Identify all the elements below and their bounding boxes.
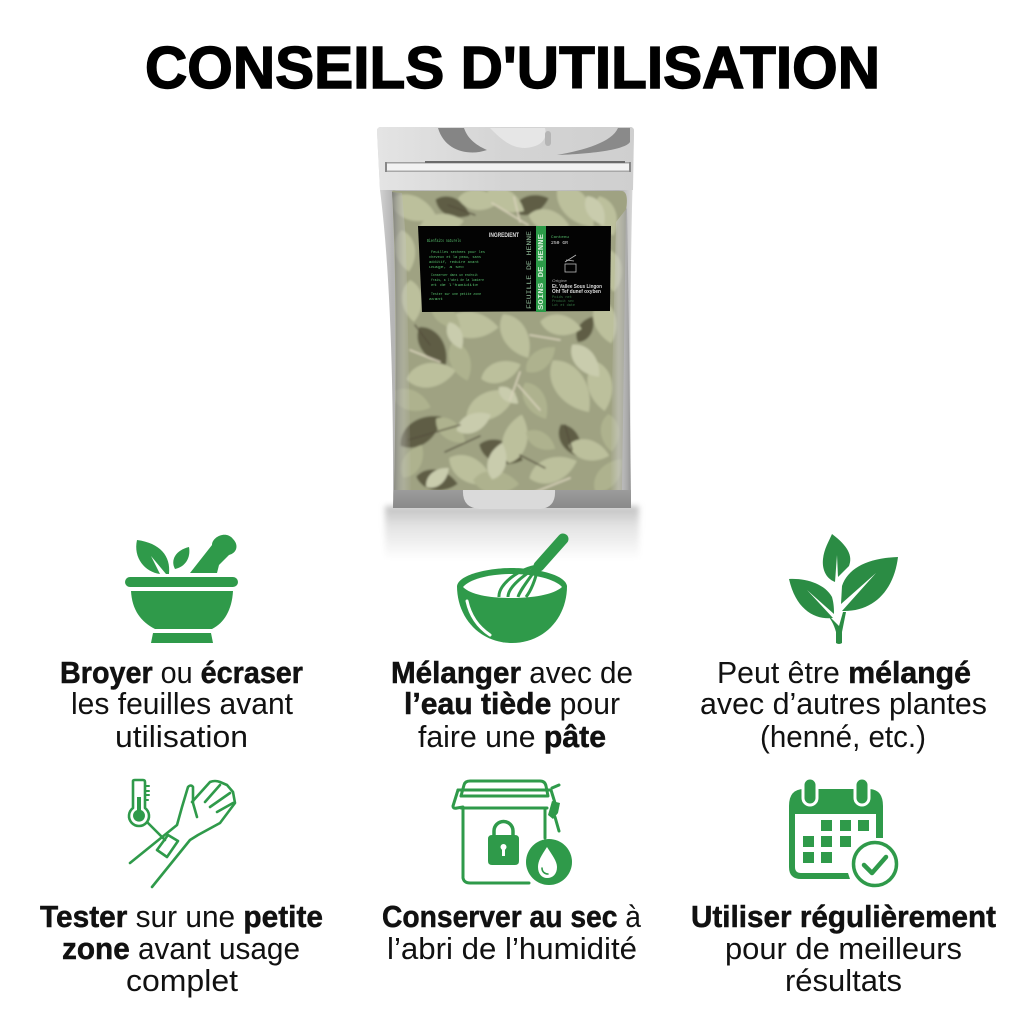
pouch top flap <box>377 127 634 190</box>
text: broyer: utilisation <box>115 719 248 754</box>
green label strip <box>536 226 546 312</box>
text: utiliser <box>691 899 996 998</box>
text: peut etre melange: avec d’autres plantes <box>700 686 987 721</box>
text: broyer <box>60 655 303 754</box>
black product label: Conserver dans un endroit <box>431 273 478 278</box>
pouch side gussets <box>392 192 631 509</box>
tip 6: use regularly <box>691 778 996 998</box>
black product label: FEUILLE DE HENNE <box>526 231 533 309</box>
black product label <box>418 226 611 312</box>
black product label: Produit sec <box>552 299 574 304</box>
black product label: 250 GR <box>551 240 568 246</box>
icon: plant sprig <box>789 534 898 644</box>
black product label: cheveux et la peau, sans <box>429 255 482 260</box>
black product label: Ohf Tef dunef oxyben <box>552 289 601 295</box>
black product label: Poids net <box>552 295 572 300</box>
tip 4: patch test <box>40 780 323 998</box>
pouch reflection <box>385 506 639 560</box>
product: pouch of dried leaves <box>377 127 639 560</box>
text: melanger: l’eau tiède pour <box>404 686 620 721</box>
text: broyer: Broyer ou écraser <box>60 655 303 690</box>
pouch body <box>377 127 634 508</box>
title: CONSEILS D'UTILISATION <box>145 35 880 101</box>
black product label: SOINS DE HENNE <box>538 234 546 310</box>
tip 1: crush the leaves <box>60 535 303 754</box>
icon: mortar and pestle <box>125 535 238 643</box>
text: utiliser: résultats <box>785 963 902 998</box>
text: tester: complet <box>126 963 238 998</box>
icon: locked jar with water drop <box>453 781 572 885</box>
text: utiliser: pour de meilleurs <box>725 931 962 966</box>
black product label: Origine <box>552 278 568 283</box>
text: peut etre melange: (henné, etc.) <box>760 719 926 754</box>
black product label: Bienfaits naturels <box>427 238 461 244</box>
text: conserver: l’abri de l’humidité <box>387 931 637 966</box>
black product label: additif, reduire avant <box>429 260 479 265</box>
text: melanger <box>391 655 633 754</box>
black product label: Lot et date <box>552 303 575 308</box>
black product label: Feuilles sechees pour les <box>431 250 486 255</box>
black product label: Contenu <box>551 236 570 240</box>
black product label: avant <box>429 298 443 302</box>
black product label: INGREDIENT <box>489 233 519 239</box>
thermometer bulb <box>133 797 145 822</box>
text: peut etre melange <box>700 655 987 754</box>
black product label: usage, a sec <box>429 266 465 270</box>
text: broyer: les feuilles avant <box>71 686 293 721</box>
black product label: et de l'humidite <box>431 283 479 288</box>
text: melanger: Mélanger avec de <box>391 655 633 690</box>
text: peut etre melange: Peut être mélangé <box>717 655 971 690</box>
black product label: frais, a l'abri de la lumiere <box>431 278 484 283</box>
text: melanger: faire une pâte <box>418 719 606 754</box>
text: tester: zone avant usage <box>62 931 300 966</box>
label pictogram <box>565 255 576 272</box>
text: tester: Tester sur une petite <box>40 899 323 934</box>
black product label: Et. Vallee Sous Lingon <box>552 284 602 290</box>
icon: bowl and whisk <box>457 539 567 643</box>
tip 2: mix with warm water <box>391 539 633 754</box>
text: utiliser: Utiliser régulièrement <box>691 899 996 934</box>
text: tester <box>40 899 323 998</box>
text: conserver: Conserver au sec à <box>382 899 642 934</box>
icon: calendar with check <box>789 778 899 888</box>
black product label: Tester sur une petite zone <box>431 292 481 297</box>
icon: arm with patch and thermometer <box>129 780 235 887</box>
tip 3: blend with other plants <box>700 534 987 754</box>
leaf filling <box>392 190 627 490</box>
text: conserver <box>382 899 642 966</box>
tip 5: keep dry <box>382 781 642 966</box>
